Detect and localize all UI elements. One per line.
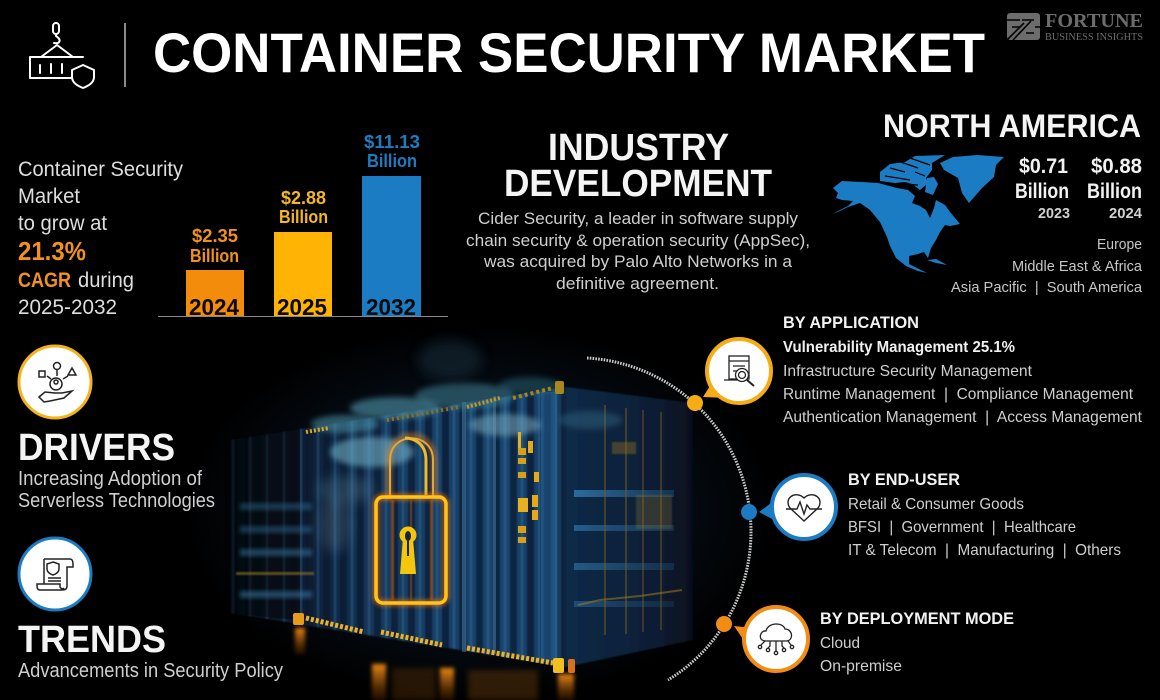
industry development text: Cider Security, a leader in software supply bbox=[478, 209, 798, 228]
region heading: NORTH AMERICA bbox=[883, 108, 1141, 144]
bar 2032: Billion bbox=[367, 151, 417, 171]
segment: by end-user: Retail & Consumer Goods bbox=[848, 496, 1024, 513]
other regions bbox=[951, 236, 1143, 296]
marker: application bbox=[687, 339, 771, 411]
segment: by application: Authentication Management | Access Management bbox=[783, 409, 1143, 426]
other regions: Europe bbox=[1097, 236, 1142, 253]
segment: by application: Infrastructure Security Management bbox=[783, 363, 1033, 380]
padlock bbox=[376, 436, 446, 603]
industry development text bbox=[466, 209, 810, 293]
drivers text: Serverless Technologies bbox=[18, 490, 215, 512]
North America values bbox=[1015, 155, 1143, 222]
trends heading: TRENDS bbox=[18, 619, 166, 661]
bar 2032: $11.13 bbox=[364, 132, 420, 152]
logo: Fortune Business Insights bbox=[1007, 10, 1143, 43]
industry development heading: INDUSTRY bbox=[548, 127, 729, 169]
marker: end-user bbox=[741, 475, 836, 539]
dotted arc bbox=[587, 358, 751, 680]
drivers text bbox=[18, 468, 215, 512]
header divider bbox=[124, 23, 126, 87]
value 2023: 2023 bbox=[1038, 205, 1070, 222]
drivers icon bbox=[19, 346, 91, 418]
drivers heading: DRIVERS bbox=[18, 427, 175, 469]
industry development heading bbox=[504, 127, 772, 205]
icon: heartbeat bbox=[786, 495, 822, 521]
value 2023: $0.71 bbox=[1019, 155, 1068, 178]
drivers text: Increasing Adoption of bbox=[18, 468, 202, 490]
segment: by deployment mode: Cloud bbox=[820, 635, 860, 652]
bar 2032 bbox=[362, 132, 421, 320]
industry development text: definitive agreement. bbox=[556, 274, 719, 293]
CAGR text block: Container Security bbox=[18, 158, 183, 181]
bar 2025: Billion bbox=[279, 207, 328, 227]
map: North America bbox=[832, 155, 1004, 273]
segment: by application: Runtime Management | Compliance Management bbox=[783, 386, 1134, 403]
CAGR text block: to grow at bbox=[18, 212, 107, 235]
title: CONTAINER SECURITY MARKET bbox=[153, 21, 985, 84]
bar 2024 bbox=[186, 226, 244, 320]
bar 2024: 2024 bbox=[189, 294, 239, 320]
marker: deployment mode bbox=[716, 607, 808, 671]
industry development heading: DEVELOPMENT bbox=[504, 163, 772, 205]
CAGR text block: CAGR bbox=[18, 269, 71, 292]
value 2024: $0.88 bbox=[1091, 155, 1142, 178]
value 2024: 2024 bbox=[1109, 205, 1143, 222]
value 2023 bbox=[1015, 155, 1070, 222]
other regions: Asia Pacific | South America bbox=[951, 279, 1143, 296]
segment: by deployment mode: On-premise bbox=[820, 658, 902, 675]
bar 2032: 2032 bbox=[366, 294, 416, 320]
other regions: Middle East & Africa bbox=[1012, 258, 1143, 275]
value 2023: Billion bbox=[1015, 180, 1069, 203]
CAGR text block: Market bbox=[18, 185, 80, 208]
industry development text: was acquired by Palo Alto Networks in a bbox=[483, 252, 793, 271]
value 2024: Billion bbox=[1087, 180, 1142, 203]
bar 2024: Billion bbox=[190, 246, 239, 266]
container photo bbox=[185, 325, 775, 700]
icon: cloud network bbox=[758, 624, 794, 655]
CAGR text block bbox=[18, 158, 183, 319]
logo: Fortune Business Insights: BUSINESS INSIGHTS bbox=[1045, 32, 1143, 43]
CAGR text block: 2025-2032 bbox=[18, 296, 117, 319]
trends icon bbox=[19, 538, 91, 610]
bar chart bbox=[158, 132, 448, 320]
segment: by end-user: IT & Telecom | Manufacturing | Others bbox=[848, 542, 1121, 559]
segment: by deployment mode: BY DEPLOYMENT MODE bbox=[820, 609, 1014, 628]
bar 2024: $2.35 bbox=[192, 226, 238, 246]
segment: by end-user: BFSI | Government | Healthcare bbox=[848, 519, 1076, 536]
bar 2025: $2.88 bbox=[281, 188, 326, 208]
icon: application security bbox=[724, 356, 754, 386]
logo: Fortune Business Insights: FORTUNE bbox=[1045, 10, 1143, 32]
segment: by application: Vulnerability Management 25.1% bbox=[783, 339, 1015, 356]
segment: by end-user: BY END-USER bbox=[848, 470, 960, 489]
CAGR text block: during bbox=[78, 269, 134, 292]
trends text: Advancements in Security Policy bbox=[18, 660, 283, 682]
segment: by end-user bbox=[848, 470, 1121, 559]
segment: by deployment mode bbox=[820, 609, 1014, 675]
CAGR text block: 21.3% bbox=[18, 236, 86, 266]
value 2024 bbox=[1087, 155, 1143, 222]
bar 2025: 2025 bbox=[277, 294, 327, 320]
industry development text: chain security & operation security (AppSec), bbox=[466, 231, 810, 250]
bar 2025 bbox=[274, 188, 332, 320]
title icon: container on crane hook with shield bbox=[30, 23, 94, 88]
segment: by application: BY APPLICATION bbox=[783, 313, 919, 332]
segment: by application bbox=[783, 313, 1143, 426]
